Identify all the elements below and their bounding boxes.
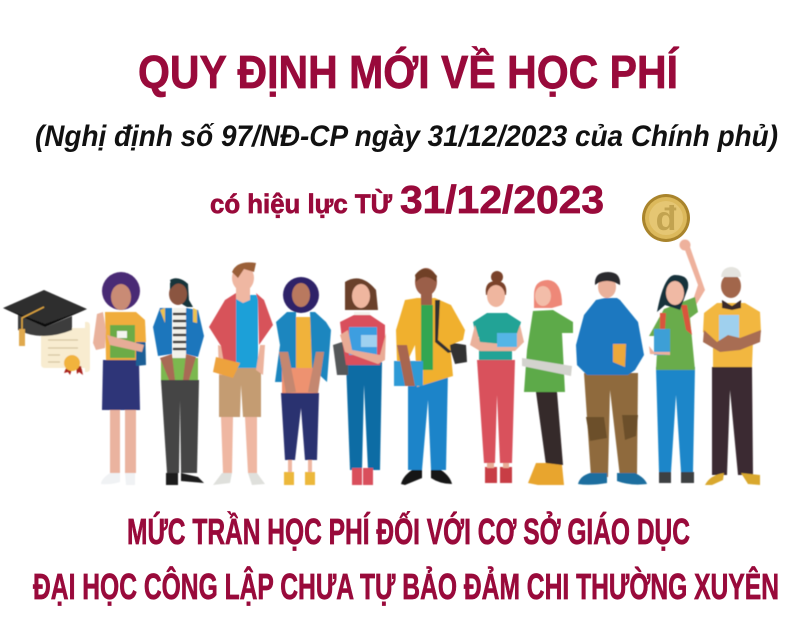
person 10: girl raising hand with green shirt	[649, 240, 705, 483]
person 3: red shirt and khaki shorts	[209, 262, 273, 485]
icon: gold dong coin	[642, 194, 690, 242]
person 4: curly hair and blue cardigan	[275, 277, 331, 485]
icon: gold dong coin: đ	[656, 200, 677, 238]
person 9: blue puffer jacket and brown trousers	[576, 272, 647, 485]
title: QUY ĐỊNH MỚI VỀ HỌC PHÍ	[138, 46, 679, 98]
effective date line: 31/12/2023	[400, 179, 604, 222]
person 7: teal shirt and coral trousers	[470, 271, 524, 483]
icon: graduation cap and diploma	[3, 290, 90, 375]
person 2: blue jacket and striped shirt	[153, 278, 204, 485]
people illustration	[93, 240, 761, 485]
person 1: yellow shirt and navy skirt	[93, 272, 146, 485]
person 5: brunette with books	[333, 278, 386, 485]
person 6: yellow jacket and backpack	[394, 268, 467, 485]
person 11: cap, yellow polo and dark trousers	[703, 267, 761, 485]
effective date line	[210, 179, 604, 222]
person 8: pink bob and green hoodie	[522, 280, 573, 485]
effective date line: có hiệu lực TỪ	[210, 188, 393, 219]
